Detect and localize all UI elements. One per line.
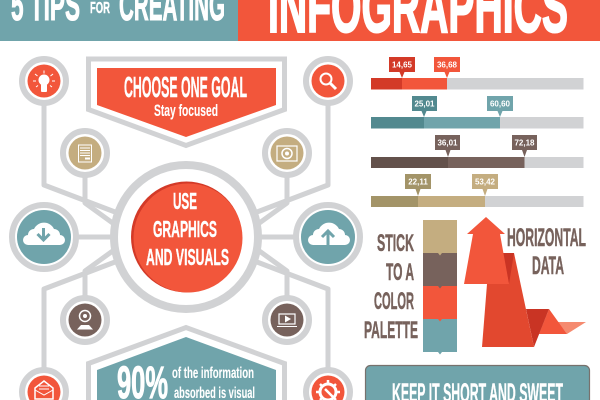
icon: camera bbox=[265, 131, 309, 175]
header: left teal band: FOR bbox=[90, 0, 110, 17]
icon: gear and wrench bbox=[306, 370, 350, 400]
folded arrow bbox=[464, 217, 586, 347]
bar chart: red: 36,68 bbox=[437, 60, 458, 70]
bar chart: red bbox=[371, 57, 584, 90]
text: horizontal data: DATA bbox=[532, 252, 564, 280]
text: stick to a color palette: TO A bbox=[386, 259, 414, 286]
panel: use graphics and visuals: USE bbox=[173, 188, 197, 214]
text: stick to a color palette: PALETTE bbox=[364, 317, 418, 344]
icon: magnifier bbox=[306, 59, 350, 103]
text: stick to a color palette bbox=[364, 230, 418, 344]
panel: choose one goal bbox=[88, 59, 284, 146]
icon: cloud download bbox=[12, 205, 76, 269]
bar chart: teal: 25,01 bbox=[414, 100, 435, 108]
bar chart: tan bbox=[371, 174, 584, 207]
icon: envelope bbox=[22, 370, 66, 400]
text: horizontal data bbox=[507, 224, 586, 280]
text: stick to a color palette: STICK bbox=[377, 230, 414, 257]
panel: 90 percent statistic bbox=[88, 328, 284, 400]
connector lines bbox=[44, 100, 328, 370]
bar chart: brown: 72,18 bbox=[514, 138, 535, 148]
bar chart: teal bbox=[371, 96, 584, 128]
bar chart: red: 14,65 bbox=[392, 60, 413, 70]
bar chart: tan: 53,42 bbox=[475, 178, 496, 186]
panel: choose one goal: Stay focused bbox=[154, 101, 218, 120]
icon: document bbox=[63, 131, 107, 175]
panel: use graphics and visuals: AND VISUALS bbox=[146, 244, 229, 270]
bar chart: brown bbox=[371, 135, 584, 168]
panel: keep it short and sweet bbox=[366, 366, 590, 400]
icon: light bulb bbox=[22, 59, 66, 103]
panel: use graphics and visuals: GRAPHICS bbox=[153, 216, 217, 242]
bar chart: teal: 60,60 bbox=[490, 100, 511, 108]
panel: 90 percent statistic: of the information bbox=[172, 365, 254, 382]
color palette stack bbox=[423, 220, 457, 354]
icon: webcam bbox=[63, 298, 107, 342]
icon: video screen bbox=[265, 298, 309, 342]
text: stick to a color palette: COLOR bbox=[374, 288, 414, 315]
panel: choose one goal: CHOOSE ONE GOAL bbox=[124, 72, 247, 104]
bar chart: brown: 36,01 bbox=[437, 138, 458, 148]
bar chart: tan: 22,11 bbox=[408, 178, 428, 186]
header: left teal band bbox=[0, 0, 238, 41]
panel: use graphics and visuals bbox=[114, 165, 258, 309]
icon: cloud upload bbox=[296, 205, 360, 269]
